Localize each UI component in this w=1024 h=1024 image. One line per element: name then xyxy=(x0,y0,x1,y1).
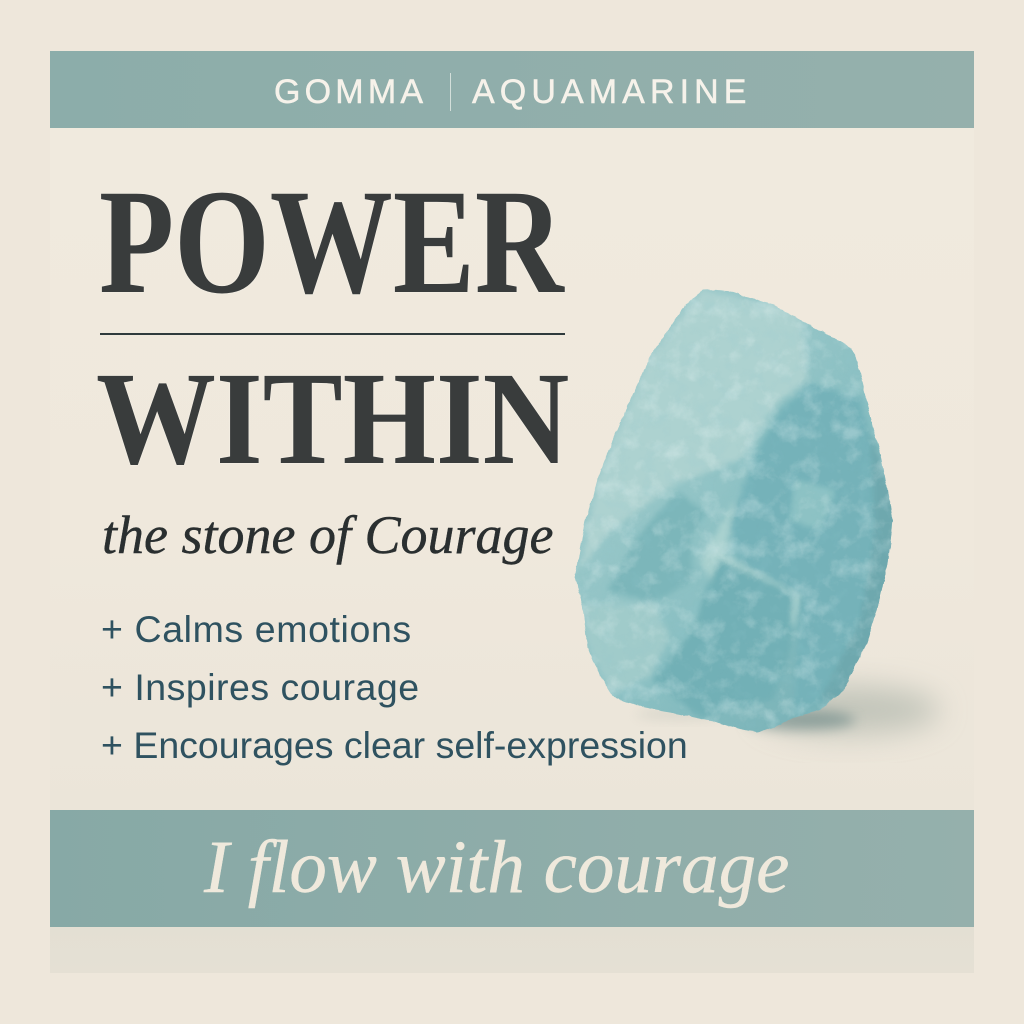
lower-left light face xyxy=(580,603,670,693)
top banner xyxy=(50,51,974,128)
mineral mottling xyxy=(582,298,892,728)
light upper-left face xyxy=(580,290,807,570)
banner divider xyxy=(450,73,451,111)
banner text: aquamarine: AQUAMARINE xyxy=(472,73,752,111)
benefits list xyxy=(101,608,688,766)
bottom banner xyxy=(50,810,974,927)
light diagonal ridge xyxy=(700,500,800,625)
benefit 1: + Calms emotions xyxy=(101,608,412,650)
benefit 3: + Encourages clear self-expression xyxy=(101,724,688,766)
benefit 2: + Inspires courage xyxy=(101,666,420,708)
lower paper strip xyxy=(50,927,974,973)
subtitle: the stone of Courage xyxy=(102,505,553,565)
banner text: gomma: GOMMA xyxy=(274,73,427,111)
stone body xyxy=(574,289,893,732)
title: within: WITHIN xyxy=(96,344,569,492)
aquamarine stone illustration xyxy=(574,289,944,746)
stone shadow xyxy=(635,686,940,734)
left recess xyxy=(607,492,707,603)
dark right rim xyxy=(826,442,893,700)
pale flecks right xyxy=(790,480,835,530)
inner paper panel xyxy=(50,128,974,810)
title: power: POWER xyxy=(99,158,564,324)
title rule xyxy=(100,333,565,335)
lower centre recess xyxy=(653,560,793,717)
affirmation text: I flow with courage xyxy=(204,826,789,909)
deep centre-right face xyxy=(730,382,874,684)
